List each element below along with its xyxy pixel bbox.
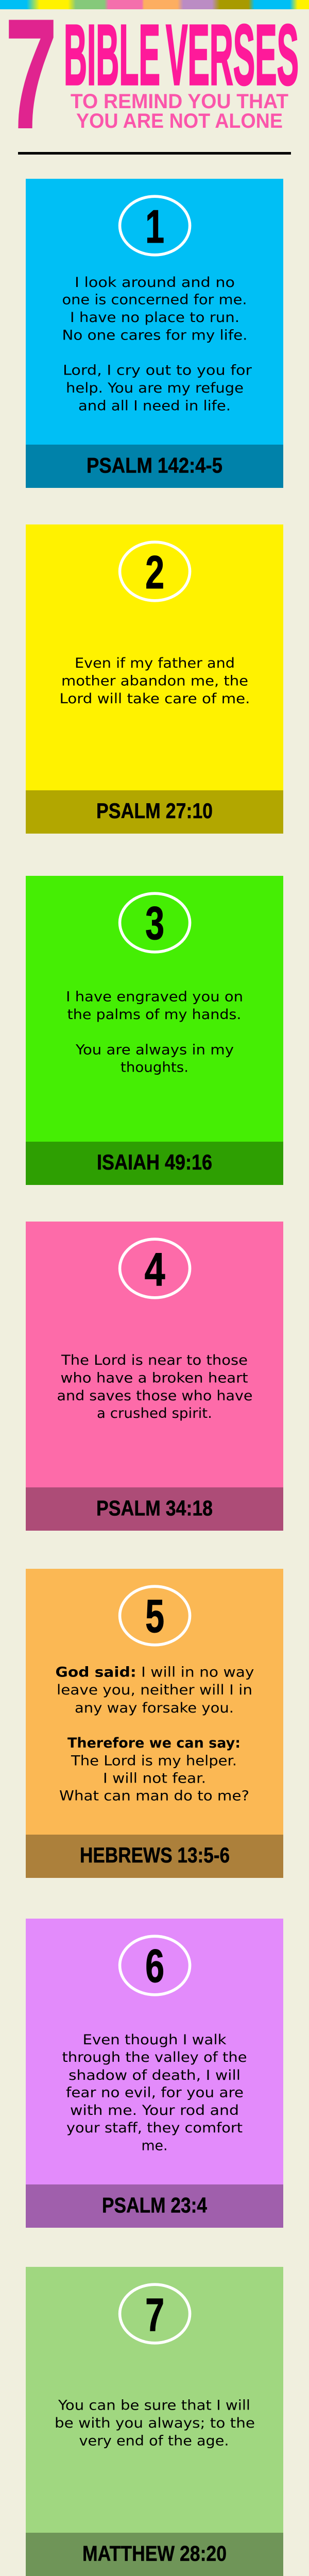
- verse text 5: What can man do to me?: [59, 1788, 249, 1804]
- number badge 7: 7: [145, 2289, 164, 2341]
- verse text 3: the palms of my hands.: [67, 1007, 241, 1023]
- verse text 1: one is concerned for me.: [62, 292, 247, 308]
- verse text 4: [57, 1352, 253, 1421]
- number badge 4: [120, 1239, 190, 1298]
- reference band 3: ISAIAH 49:16: [97, 1150, 212, 1174]
- verse text 6: your staff, they comfort: [66, 2120, 243, 2136]
- panel: verse 4: [26, 1222, 283, 1531]
- reference band 7: MATTHEW 28:20: [82, 2541, 227, 2566]
- verse text 1: I look around and no: [75, 275, 235, 291]
- reference band 6: [26, 2184, 283, 2228]
- reference band 3: [26, 1142, 283, 1185]
- verse text 3: You are always in my: [75, 1042, 234, 1058]
- number badge 2: [120, 542, 190, 601]
- reference band 5: HEBREWS 13:5-6: [80, 1843, 230, 1867]
- verse text 6: Even though I walk: [82, 2032, 227, 2048]
- number badge 3: 3: [145, 897, 164, 950]
- reference band 6: PSALM 23:4: [102, 2193, 208, 2217]
- verse text 1: Lord, I cry out to you for: [63, 362, 252, 378]
- reference band 2: PSALM 27:10: [96, 799, 213, 823]
- top colour gradient bar: [0, 0, 309, 9]
- verse text 5: God said: I will in no way: [56, 1664, 254, 1681]
- verse text 6: fear no evil, for you are: [66, 2085, 244, 2101]
- verse text 1: and all I need in life.: [78, 398, 231, 414]
- verse text 7: You can be sure that I will: [58, 2397, 250, 2413]
- reference band 7: [26, 2533, 283, 2576]
- number badge 5: 5: [145, 1590, 164, 1642]
- verse text 5: I will not fear.: [103, 1770, 206, 1787]
- subtitle: [71, 90, 288, 132]
- reference band 1: PSALM 142:4-5: [87, 453, 222, 478]
- verse text 4: The Lord is near to those: [61, 1352, 248, 1368]
- verse text 2: Lord will take care of me.: [60, 691, 250, 707]
- verse text 7: be with you always; to the: [55, 2415, 255, 2431]
- verse text 4: a crushed spirit.: [97, 1405, 212, 1421]
- number badge 1: 1: [145, 201, 164, 253]
- verse text 2: mother abandon me, the: [61, 673, 248, 689]
- verse text 6: [62, 2032, 247, 2154]
- verse text 3: thoughts.: [121, 1059, 188, 1075]
- panel: verse 1: [26, 179, 283, 488]
- number badge 6: 6: [145, 1940, 164, 1992]
- verse text 2: Even if my father and: [75, 655, 235, 671]
- subtitle: TO REMIND YOU THAT: [71, 90, 288, 113]
- verse text 1: I have no place to run.: [70, 310, 239, 326]
- reference band 4: [26, 1487, 283, 1531]
- number badge 5: [120, 1586, 190, 1645]
- verse text 6: shadow of death, I will: [68, 2067, 241, 2083]
- number badge 3: [120, 893, 190, 952]
- verse text 3: I have engraved you on: [66, 989, 243, 1005]
- verse text 6: through the valley of the: [62, 2049, 247, 2065]
- panel: verse 6: [26, 1919, 283, 2228]
- verse text 7: [55, 2397, 255, 2449]
- reference band 5: [26, 1835, 283, 1878]
- number badge 7: [120, 2284, 190, 2343]
- title: [5, 0, 299, 161]
- panel: verse 3: [26, 876, 283, 1185]
- number badge 4: 4: [145, 1244, 165, 1296]
- panel: verse 7: [26, 2267, 283, 2576]
- number badge 6: [120, 1936, 190, 1995]
- verse text 7: very end of the age.: [79, 2433, 229, 2449]
- panel: verse 2: [26, 524, 283, 834]
- verse text 1: No one cares for my life.: [62, 328, 247, 344]
- verse text 5: [56, 1664, 254, 1804]
- verse text 6: with me. Your rod and: [70, 2103, 239, 2119]
- verse text 5: The Lord is my helper.: [71, 1753, 237, 1769]
- verse text 4: and saves those who have: [57, 1388, 253, 1404]
- verse text 3: [66, 989, 243, 1075]
- panel: verse 5: [26, 1569, 283, 1878]
- subtitle: YOU ARE NOT ALONE: [76, 110, 283, 132]
- verse text 1: [62, 275, 252, 414]
- reference band 1: [26, 445, 283, 488]
- number badge 2: 2: [145, 547, 164, 599]
- verse text 2: [60, 655, 250, 707]
- verse text 4: who have a broken heart: [61, 1370, 248, 1386]
- verse text 1: help. You are my refuge: [66, 380, 244, 396]
- reference band 2: [26, 790, 283, 834]
- reference band 4: PSALM 34:18: [96, 1496, 213, 1520]
- verse text 5: Therefore we can say:: [67, 1735, 241, 1751]
- number badge 1: [120, 196, 190, 255]
- verse text 6: me.: [141, 2138, 168, 2154]
- verse text 5: leave you, neither will I in: [57, 1682, 252, 1698]
- verse text 5: any way forsake you.: [75, 1700, 234, 1716]
